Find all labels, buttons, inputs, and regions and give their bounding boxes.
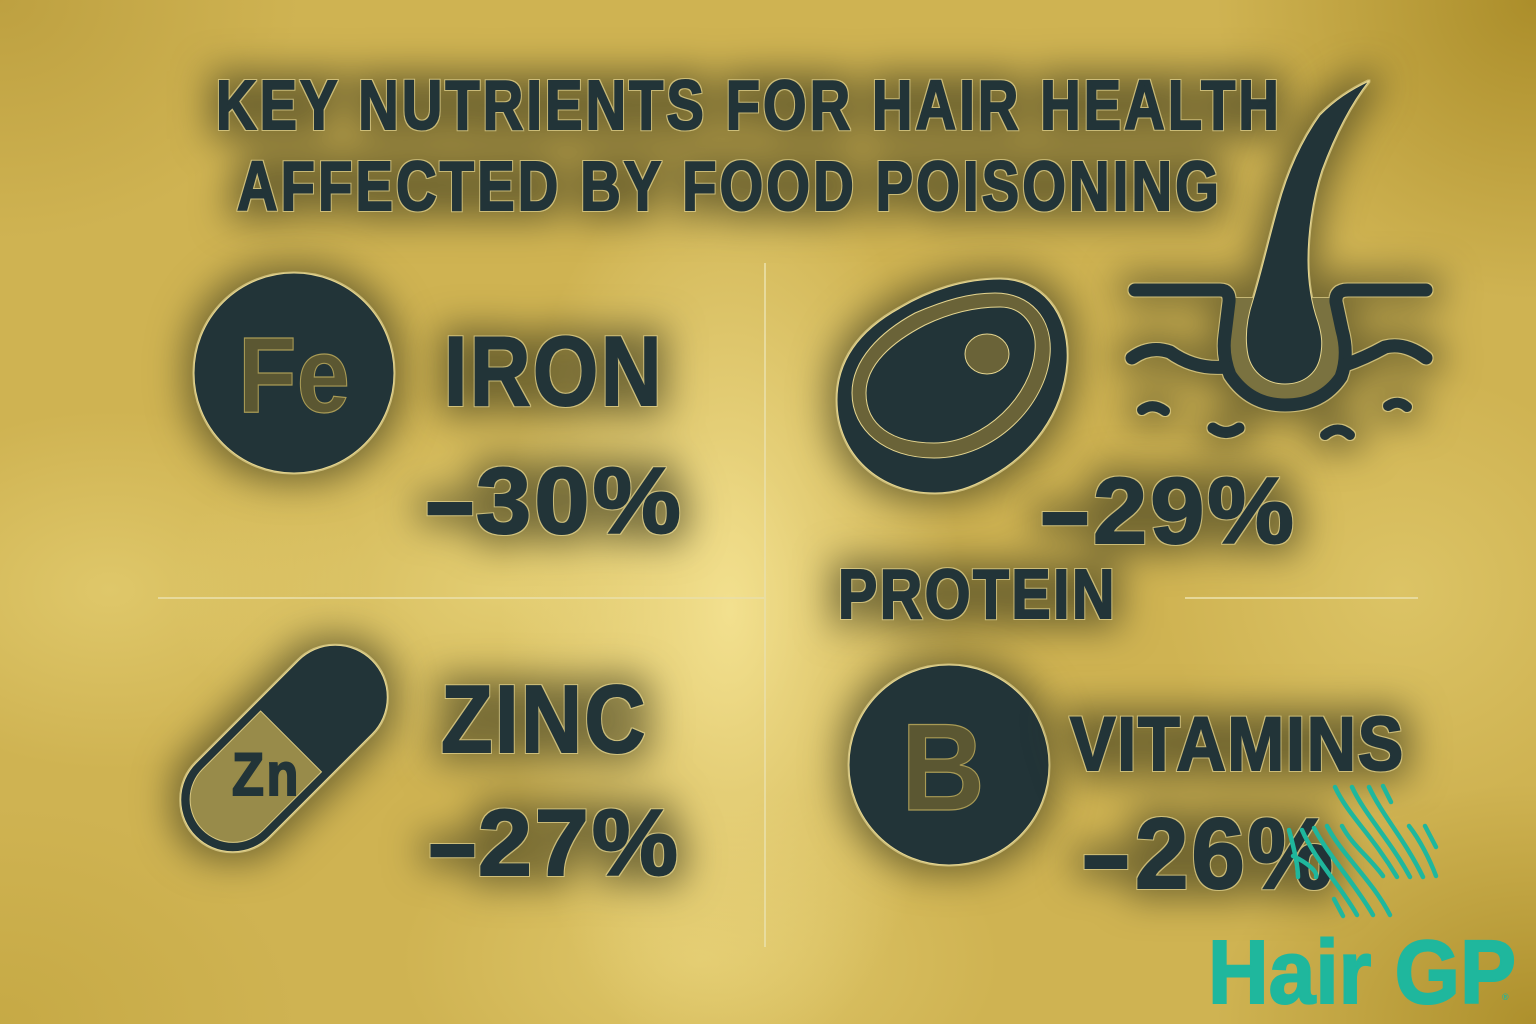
panel: zinc: [159, 624, 681, 895]
zinc label and value: 27%: [478, 790, 681, 895]
title: AFFECTED BY FOOD POISONING: [237, 147, 1222, 225]
panel: protein: [837, 279, 1297, 633]
protein value and label: [838, 458, 1297, 633]
logo: Hair GP: [1208, 786, 1516, 1023]
panel: b vitamins: [849, 665, 1405, 910]
iron label and value: 30%: [476, 448, 684, 553]
title: [216, 66, 1282, 225]
iron label and value: [423, 316, 684, 553]
zinc label and value: -: [426, 790, 479, 895]
vitamins label and value: [1070, 702, 1405, 910]
icon: hair follicle: [1132, 81, 1426, 435]
vitamins label and value: -: [1080, 798, 1132, 910]
iron label and value: -: [423, 448, 477, 553]
vitamins label and value: 26%: [1135, 798, 1336, 910]
zinc label and value: ZINC: [441, 666, 648, 773]
protein value and label: 29%: [1093, 458, 1297, 563]
protein value and label: -: [1038, 458, 1092, 563]
icon: zinc capsule: Zn: [232, 741, 301, 808]
zinc label and value: [426, 666, 681, 895]
dividers: [158, 263, 1418, 947]
title: KEY NUTRIENTS FOR HAIR HEALTH: [216, 66, 1282, 144]
registered mark: ®: [1502, 992, 1509, 1002]
icon: Fe circle: Fe: [238, 314, 350, 435]
iron label and value: IRON: [444, 316, 664, 426]
icon: Fe circle: [194, 273, 394, 473]
wordmark: Hair GP: [1208, 923, 1516, 1023]
vitamins label and value: VITAMINS: [1070, 702, 1405, 787]
panel: iron: [194, 273, 684, 553]
icon: B circle: [849, 665, 1049, 865]
icon: meat cut: [837, 279, 1067, 493]
protein value and label: PROTEIN: [838, 555, 1117, 633]
icon: B circle: B: [901, 699, 985, 837]
icon: hair strands: [1289, 786, 1436, 916]
icon: zinc capsule: [159, 624, 409, 873]
